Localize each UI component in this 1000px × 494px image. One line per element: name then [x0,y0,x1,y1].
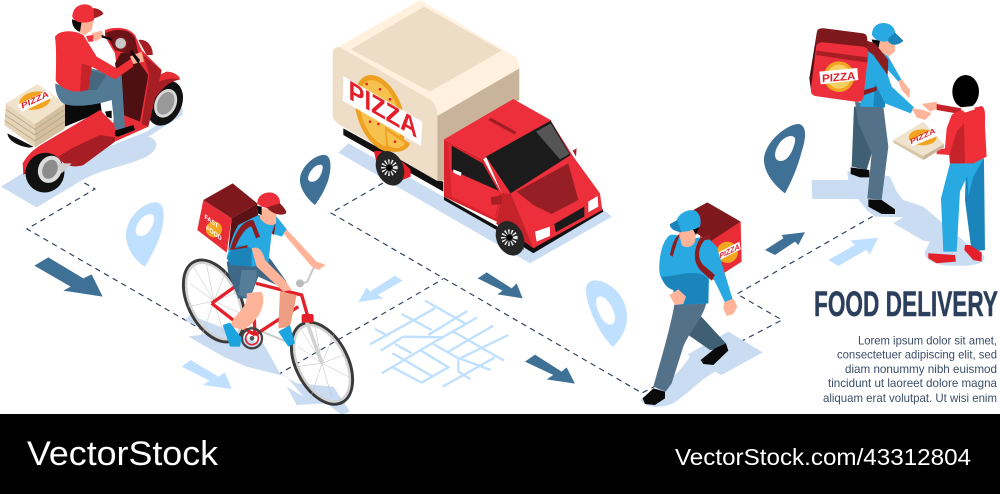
icon: dark location pin centre [300,155,330,205]
walker backpack [693,202,742,280]
arrow: dark left [34,257,103,297]
arrow: light right [828,238,878,266]
icon: light location pin right [586,280,627,347]
handoff scene [809,23,987,266]
delivery backpack [197,183,258,253]
scooter body [19,28,190,199]
truck pizza sign: PIZZA [349,74,418,144]
arrow: light centre [358,276,403,302]
scooter rider [55,4,144,137]
watermark footer [0,414,1000,494]
dashed delivery route [27,173,875,393]
truck cargo box [333,0,519,192]
body text: tincidunt ut laoreet dolore magna [828,376,997,390]
bicycle courier [171,183,365,415]
pizza box [893,122,944,160]
truck cab [444,99,603,253]
delivery backpack: FOOD [206,224,222,243]
pizza backpack [809,28,868,102]
street map [370,301,508,387]
bicycle rider [223,192,326,347]
bicycle frame [212,267,322,363]
scooter courier [1,4,190,207]
pizza box: PIZZA [910,127,936,146]
pizza backpack: PIZZA [822,70,855,85]
truck wheels [370,146,530,260]
icon: dark location pin top right [764,124,805,193]
truck pizza sign [343,68,422,159]
arrow: dark right [765,232,805,255]
walker backpack: PIZZA [719,242,740,261]
handoff courier [851,23,932,214]
pizza truck [333,0,612,263]
pizza box stack [4,84,65,148]
arrow: dark centre upper [478,272,523,298]
body text [823,334,997,405]
watermark logo: VectorStock [27,435,219,473]
customer [922,75,987,263]
arrow: dark centre lower [525,355,575,384]
bicycle wheels [171,250,365,414]
icon: light location pin left [126,202,164,267]
walker figure [643,210,737,405]
pizza box stack: PIZZA [21,89,50,111]
watermark id: VectorStock.com/43312804 [675,444,971,470]
arrow: light under bicycle [182,360,232,389]
body text: diam nonummy nibh euismod [845,362,997,376]
delivery backpack: FAST [204,213,218,231]
walking courier [641,202,763,407]
